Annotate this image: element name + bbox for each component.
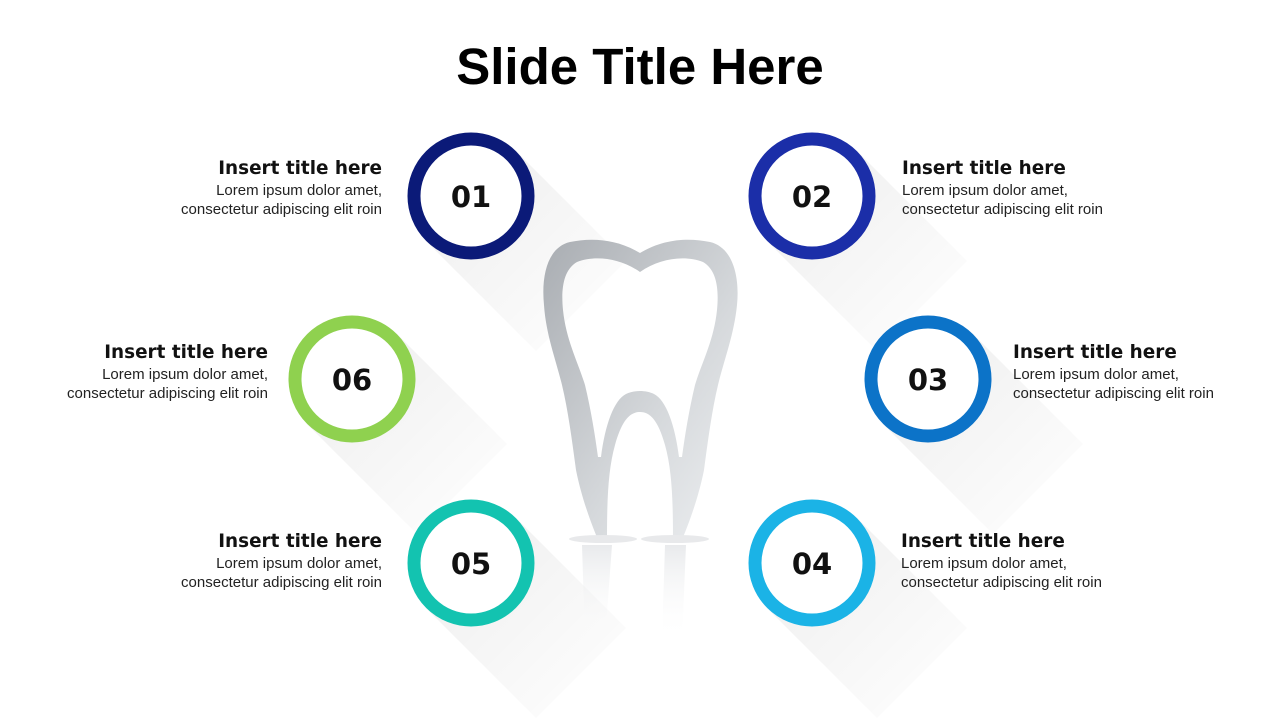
text 03: consectetur adipiscing elit roin — [1013, 385, 1214, 402]
text 01: Insert title here — [218, 158, 382, 179]
circle 05: 05 — [451, 547, 491, 581]
text 05: Lorem ipsum dolor amet, — [216, 555, 382, 572]
circle 01: 01 — [451, 180, 491, 214]
text 04 — [901, 531, 1102, 591]
text 04: consectetur adipiscing elit roin — [901, 574, 1102, 591]
circle 02: 02 — [792, 180, 832, 214]
text 01: consectetur adipiscing elit roin — [181, 201, 382, 218]
text 05: consectetur adipiscing elit roin — [181, 574, 382, 591]
circle 04 — [755, 506, 869, 620]
text 03 — [1013, 342, 1214, 402]
text 01 — [181, 158, 382, 218]
circle 06: 06 — [332, 363, 372, 397]
text 02: consectetur adipiscing elit roin — [902, 201, 1103, 218]
text 03: Lorem ipsum dolor amet, — [1013, 366, 1179, 383]
text 02: Insert title here — [902, 158, 1066, 179]
text 02 — [902, 158, 1103, 218]
circle 02 — [755, 139, 869, 253]
circle 01 — [414, 139, 528, 253]
text 06: consectetur adipiscing elit roin — [67, 385, 268, 402]
text 04: Lorem ipsum dolor amet, — [901, 555, 1067, 572]
title: Slide Title Here — [456, 38, 824, 95]
text 06: Lorem ipsum dolor amet, — [102, 366, 268, 383]
text 05: Insert title here — [218, 531, 382, 552]
tooth icon — [543, 240, 738, 640]
circle 04: 04 — [792, 547, 832, 581]
text 06: Insert title here — [104, 342, 268, 363]
circle 03 — [871, 322, 985, 436]
circle 05 — [414, 506, 528, 620]
text 02: Lorem ipsum dolor amet, — [902, 182, 1068, 199]
text 04: Insert title here — [901, 531, 1065, 552]
long shadows — [307, 151, 1083, 718]
text 06 — [67, 342, 268, 402]
circle 03: 03 — [908, 363, 948, 397]
text 01: Lorem ipsum dolor amet, — [216, 182, 382, 199]
text 05 — [181, 531, 382, 591]
circle 06 — [295, 322, 409, 436]
text 03: Insert title here — [1013, 342, 1177, 363]
